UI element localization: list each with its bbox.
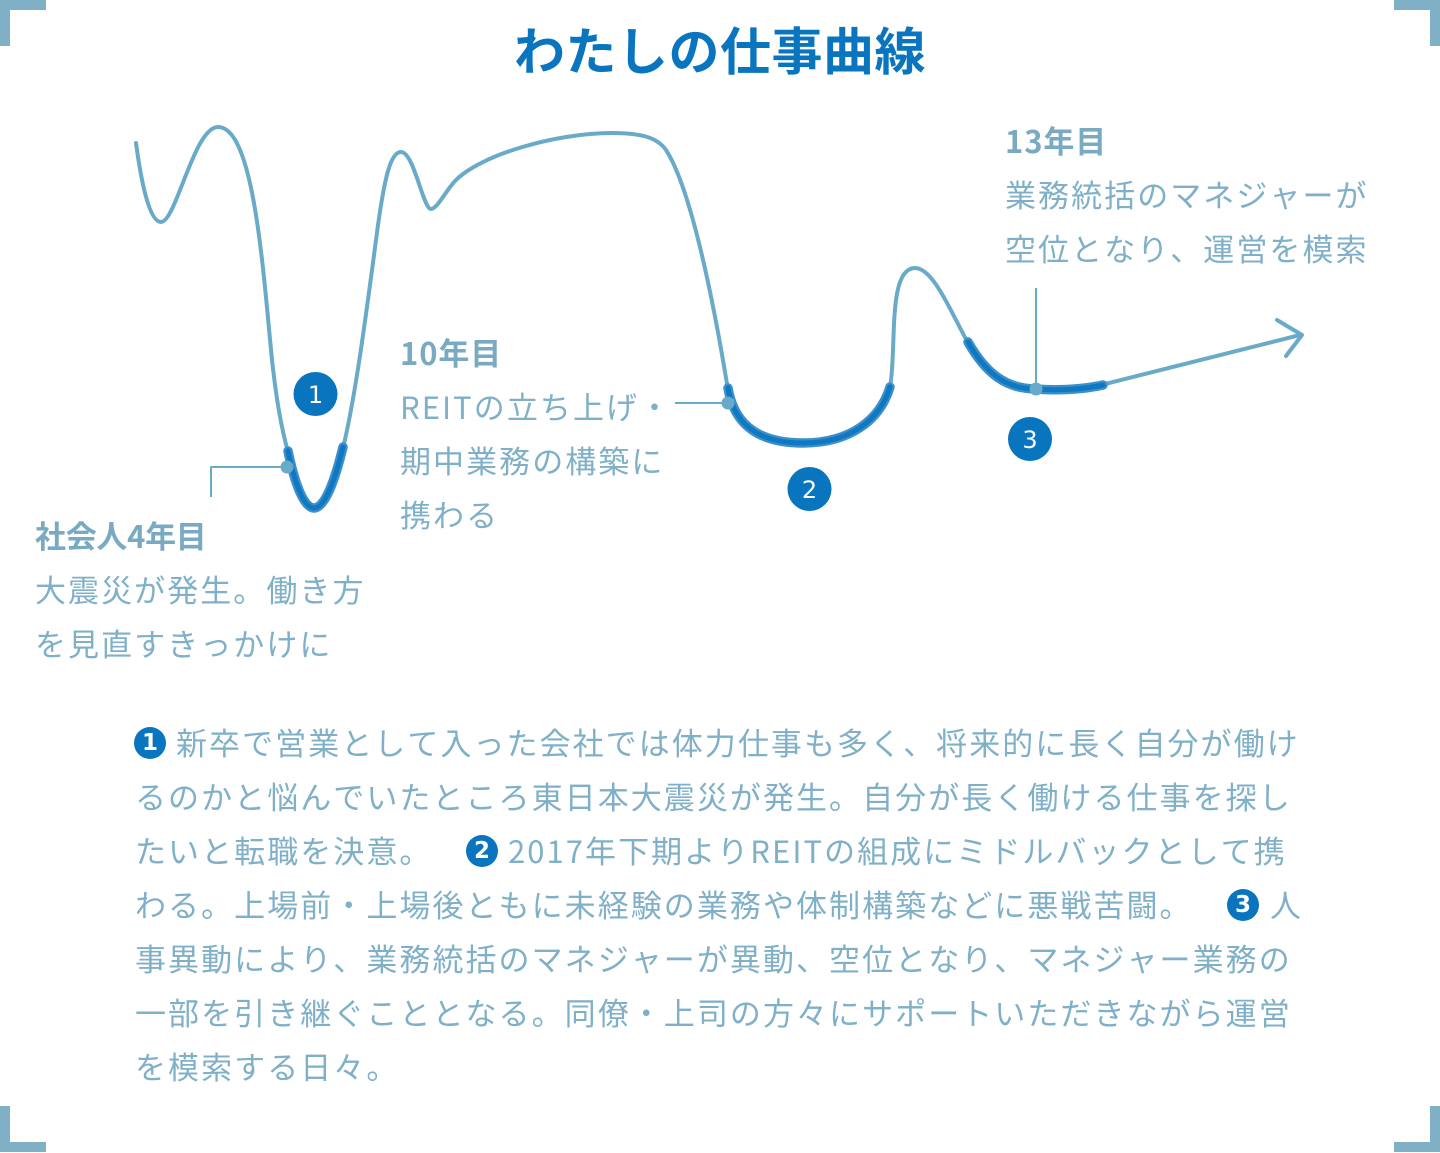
marker 1 <box>294 372 338 416</box>
annotation: 10th year <box>400 329 672 536</box>
body text: 一部を引き継ぐこととなる。同僚・上司の方々にサポートいただきながら運営 <box>135 989 1292 1034</box>
career curve chart <box>134 125 1304 513</box>
corner bracket: top right <box>1394 0 1440 46</box>
marker 3 <box>1008 417 1052 461</box>
annotation: 10th year: 期中業務の構築に <box>400 437 664 482</box>
annotation: 4th year: 大震災が発生。働き方 <box>35 566 366 611</box>
annotation: 13th year: 13年目 <box>1005 117 1107 162</box>
marker 2 <box>788 467 832 511</box>
marker 2: 2 <box>802 476 817 504</box>
body text: 2017年下期よりREITの組成にミドルバックとして携 <box>508 827 1287 872</box>
body text <box>134 719 1303 1088</box>
annotation: 4th year: を見直すきっかけに <box>35 620 332 665</box>
marker 3: 3 <box>1022 426 1038 454</box>
body text: 新卒で営業として入った会社では体力仕事も多く、将来的に長く自分が働け <box>176 719 1300 764</box>
corner bracket: top left <box>0 0 46 46</box>
annotation: 10th year: 10年目 <box>400 329 502 374</box>
marker 1: 1 <box>308 381 323 409</box>
number badge 1: 1 <box>142 730 158 756</box>
annotation: 4th year <box>35 512 366 665</box>
annotation: 13th year <box>1005 117 1369 270</box>
annotation: 10th year: 携わる <box>400 491 499 536</box>
body text: たいと転職を決意。 <box>135 827 432 872</box>
number badge 2: 2 <box>474 838 490 864</box>
body text: るのかと悩んでいたところ東日本大震災が発生。自分が長く働ける仕事を探し <box>135 773 1292 818</box>
number badge 3 <box>1227 889 1259 921</box>
leader line: 13th year <box>1030 288 1042 396</box>
number badge 1 <box>134 727 166 759</box>
corner bracket: bottom right <box>1394 1106 1440 1152</box>
leader line: 4th year <box>211 460 294 497</box>
number badge 2 <box>466 835 498 867</box>
annotation: 4th year: 社会人4年目 <box>35 512 206 557</box>
number badge 3: 3 <box>1235 892 1251 918</box>
corner bracket: bottom left <box>0 1106 46 1152</box>
annotation: 10th year: REITの立ち上げ・ <box>400 383 672 428</box>
curve line with arrow <box>136 127 1302 510</box>
annotation: 13th year: 空位となり、運営を模索 <box>1005 225 1369 270</box>
body text: 事異動により、業務統括のマネジャーが異動、空位となり、マネジャー業務の <box>135 935 1292 980</box>
body text: わる。上場前・上場後ともに未経験の業務や体制構築などに悪戦苦闘。 <box>135 881 1193 926</box>
body text: を模索する日々。 <box>135 1043 399 1088</box>
highlighted section 3 <box>968 342 1103 390</box>
highlighted section 1 <box>288 447 343 508</box>
highlighted section 2 <box>728 387 890 443</box>
leader line: 10th year <box>675 396 734 410</box>
body text: 人 <box>1270 881 1303 926</box>
annotation: 13th year: 業務統括のマネジャーが <box>1005 171 1369 216</box>
title: わたしの仕事曲線 <box>514 11 926 85</box>
